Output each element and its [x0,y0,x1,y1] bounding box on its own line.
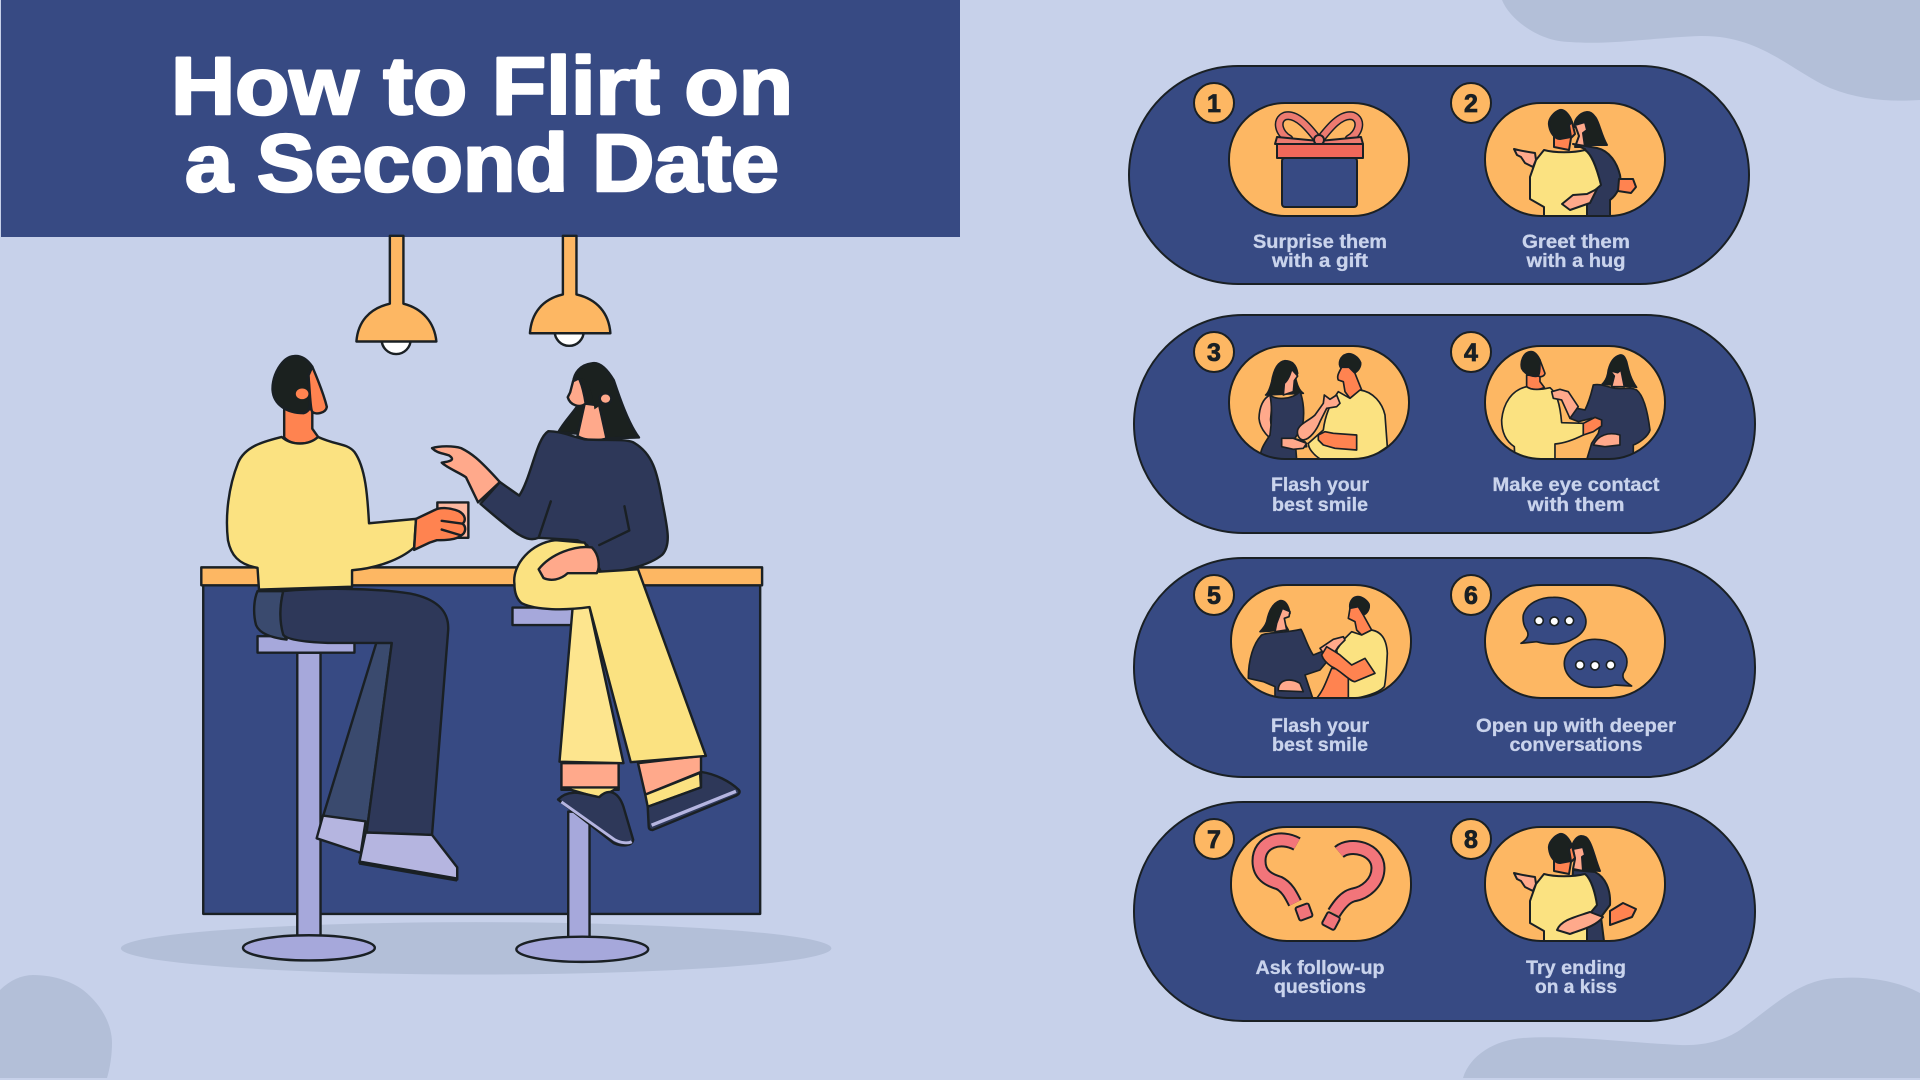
bar counter [201,567,762,914]
icon: eye contact couple [1485,346,1665,460]
label: tip 6: conversations [1510,735,1642,756]
background blob: top right [1502,0,1920,101]
badge: 3: 3 [1207,339,1221,367]
panel: tips 3 and 4 [1134,315,1755,533]
bubble one [1521,597,1586,644]
background blob: bottom right [1463,978,1920,1078]
badge: 1: 1 [1207,90,1221,118]
badge: 2 [1451,83,1491,123]
badge: 1 [1194,83,1234,123]
right stool [512,608,648,962]
badge: 5 [1194,575,1234,615]
label: tip 5: best smile [1272,735,1368,756]
badge: 8 [1451,819,1491,859]
left lamp [356,236,436,354]
label: tip 6: Open up with deeper [1476,716,1677,737]
label: tip 5: Flash your [1271,716,1370,737]
label: tip 8: Try ending [1526,958,1626,979]
label: tip 1: with a gift [1271,251,1369,272]
badge: 4: 4 [1464,339,1478,367]
icon: kiss [1485,827,1665,941]
label: tip 3: Flash your [1271,475,1370,496]
panel: tips 1 and 2 [1129,66,1749,284]
label: tip 1: Surprise them [1253,232,1387,253]
badge: 4 [1451,332,1491,372]
icon: gift [1229,103,1409,216]
badge: 6: 6 [1464,582,1478,610]
woman [432,363,740,845]
badge: 7 [1194,819,1234,859]
badge: 2: 2 [1464,90,1478,118]
title: How to Flirt on [171,41,793,132]
icon: couple talking [1231,585,1411,700]
left stool [243,636,375,960]
title: a Second Date [185,118,779,209]
label: tip 7: questions [1274,977,1366,998]
background blob: bottom left [0,975,112,1078]
icon: speech bubbles [1485,585,1665,698]
badge: 6 [1451,575,1491,615]
panel: tips 7 and 8 [1134,802,1755,1021]
label: tip 2: Greet them [1522,232,1630,253]
panel: tips 5 and 6 [1134,558,1755,777]
bubble two [1564,639,1632,687]
label: tip 3: best smile [1272,495,1368,516]
badge: 8: 8 [1464,826,1478,854]
badge: 5: 5 [1207,582,1221,610]
label: tip 2: with a hug [1525,251,1626,272]
illustration: couple at a bar [121,236,831,974]
right lamp [530,236,610,346]
floor shadow [121,922,831,974]
icon: smiling couple [1229,346,1409,460]
label: tip 7: Ask follow-up [1256,958,1384,979]
title banner [1,0,960,237]
label: tip 4: Make eye contact [1492,475,1660,496]
man [227,356,468,879]
icon: hug [1485,103,1665,216]
label: tip 4: with them [1526,495,1624,516]
badge: 3 [1194,332,1234,372]
label: tip 8: on a kiss [1535,977,1617,998]
icon: question marks [1231,827,1411,941]
badge: 7: 7 [1207,826,1221,854]
